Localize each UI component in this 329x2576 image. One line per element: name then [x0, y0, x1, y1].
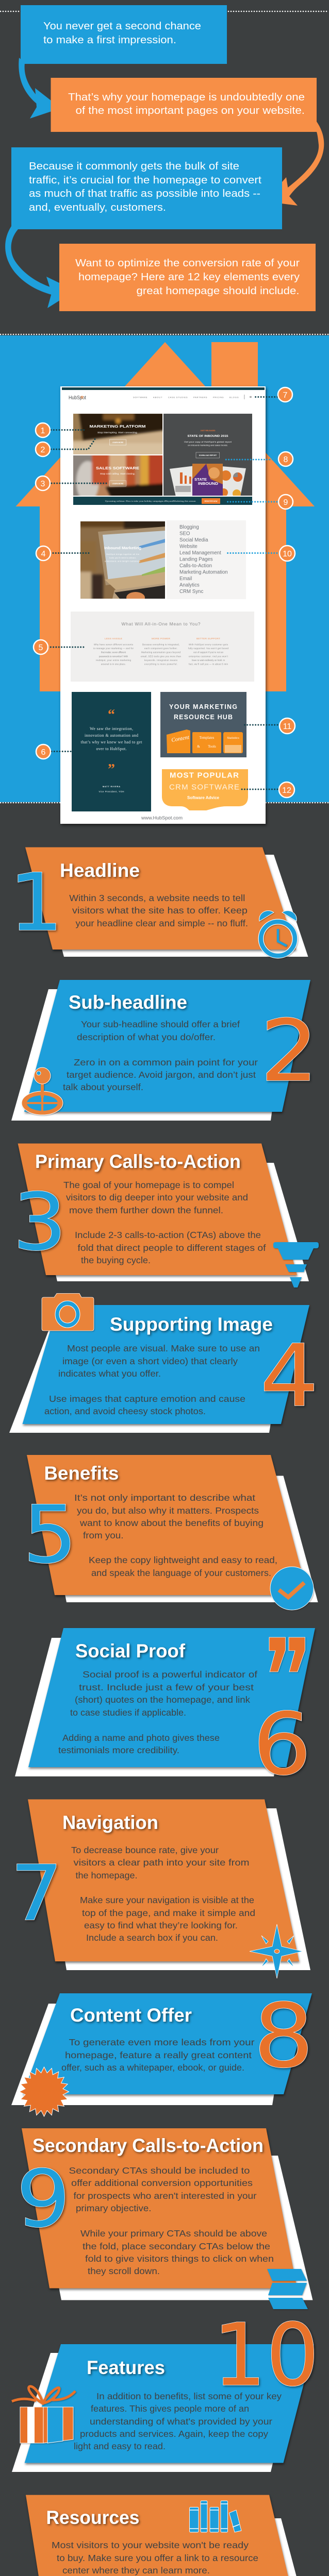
heading: primary calls-to-action: Primary Calls-to-Action — [35, 1151, 241, 1172]
text: resources body — [52, 2540, 278, 2576]
icon: gift box — [12, 2386, 75, 2443]
callout 11: 11 — [283, 722, 291, 731]
text: benefits body: Keep the copy lightweight and easy to read, — [89, 1555, 277, 1565]
intro box: homepage importance — [51, 78, 317, 132]
screenshot: feature list: Lead Management — [179, 550, 221, 556]
intro box: convert traffic: traffic, it’s crucial for the homepage to convert — [29, 174, 261, 186]
callout 4 — [36, 546, 91, 561]
text: navigation body: the homepage. — [75, 1870, 137, 1880]
text: primary calls-to-action body — [63, 1180, 266, 1265]
screenshot: benefits columns: that matter, seven different — [101, 651, 126, 653]
text: supporting image body: image (or even a short video) that clearly — [62, 1356, 238, 1366]
callout 8: 8 — [284, 455, 288, 464]
text: supporting image body: Use images that capture emotion and cause — [49, 1394, 245, 1404]
screenshot: feature list: Blogging — [179, 524, 199, 530]
text: supporting image body — [44, 1343, 260, 1416]
screenshot: benefits columns: With HubSpot every customer gets — [189, 643, 228, 646]
heading: content offer: Content Offer — [70, 2005, 192, 2026]
intro box: first impression: You never get a second chance — [43, 20, 201, 32]
screenshot: most popular CRM badge: MOST POPULAR — [170, 771, 239, 780]
text: content offer body: homepage, feature a really great content — [65, 2050, 252, 2060]
arrow: orange curve to third box — [265, 122, 324, 206]
text: social proof body: testimonials more credibility. — [58, 1745, 179, 1755]
number 9: 9 — [17, 2154, 70, 2245]
screenshot: feature list: Email — [179, 576, 192, 582]
callout 12 — [241, 782, 294, 798]
screenshot: benefits columns: enterprise customer. And you won’t — [189, 655, 228, 657]
text: secondary calls-to-action body: While your primary CTAs should be above — [80, 2228, 267, 2239]
text: features body: understanding of what's provided by your — [90, 2416, 272, 2427]
icon: check mark — [270, 1567, 314, 1610]
text: primary calls-to-action body: Include 2-3 calls-to-action (CTAs) above the — [75, 1230, 261, 1240]
heading: supporting image: Supporting Image — [110, 1314, 273, 1335]
intro box: optimize conversion: Want to optimize the conversion rate of your — [75, 257, 300, 269]
intro box: optimize conversion — [59, 244, 316, 311]
screenshot: testimonial: We saw the integration, — [90, 726, 133, 731]
text: navigation body: Make sure your navigation is visible at the — [80, 1895, 254, 1905]
screenshot: state of inbound panel: DOWNLOAD REPORT — [199, 454, 217, 456]
text: sub-headline body: Zero in on a common pain point for your — [74, 1057, 258, 1067]
screenshot: benefits columns: to manage your marketing — and for — [93, 647, 134, 650]
screenshot: supporting laptop image: Inbound Marketing — [104, 547, 141, 550]
text: social proof body: to case studies if applicable. — [70, 1707, 186, 1718]
text: secondary calls-to-action body: offer additional conversion opportunities — [71, 2178, 253, 2188]
text: supporting image body: indicates what you offer. — [58, 1368, 161, 1379]
intro box: first impression — [21, 5, 227, 64]
panel: social proof — [15, 1628, 315, 1794]
text: benefits body: you do, but also why it matters. Prospects — [77, 1505, 259, 1516]
number 4: 4 — [260, 1327, 319, 1426]
text: content offer body — [61, 2037, 255, 2073]
panel: features — [12, 2306, 319, 2472]
screenshot: testimonial: over to HubSpot. — [96, 747, 127, 751]
screenshot: supporting laptop image: HubSpot brings together all the — [106, 553, 139, 555]
callout 9: 9 — [284, 498, 288, 507]
intro box: convert traffic: and, eventually, customers. — [29, 201, 166, 213]
text: navigation body: To decrease bounce rate, give your — [71, 1845, 219, 1855]
screenshot: resource hub banner: Content — [171, 734, 190, 743]
text: features body: In addition to benefits, list some of your key — [96, 2391, 282, 2401]
screenshot: benefits columns: fully supported. You won’t get boxed — [188, 647, 229, 650]
panel: content offer — [11, 1985, 314, 2116]
heading: navigation: Navigation — [62, 1812, 158, 1833]
screenshot: benefits columns: What Will All-in-One Mean to You? — [122, 621, 201, 626]
screenshot: state of inbound panel: Get your copy of HubSpot’s global report — [184, 440, 232, 443]
text: primary calls-to-action body: fold that direct people to different stages of — [77, 1243, 266, 1253]
heading: features: Features — [87, 2357, 165, 2378]
screenshot: logo and navigation: ABOUT — [153, 396, 162, 399]
text: benefits body: want to know about the benefits of buying — [79, 1518, 264, 1528]
callout 3 — [36, 476, 107, 490]
callout 7 — [254, 387, 292, 402]
icon: compass — [250, 1924, 303, 1978]
text: social proof body: trust. Include just a few of your best — [79, 1682, 254, 1692]
text: primary calls-to-action body: visitors to dig deeper into your website and — [66, 1192, 248, 1202]
text: features body: light and easy to read. — [74, 2441, 166, 2451]
text: secondary calls-to-action body: the fold, place secondary CTAs below the — [83, 2241, 270, 2251]
screenshot: resource hub banner — [160, 692, 246, 757]
screenshot: benefits columns: everything is more powerful. — [144, 663, 177, 666]
number 1: 1 — [9, 857, 63, 949]
callout 6: 6 — [41, 748, 46, 757]
screenshot: feature list — [167, 520, 246, 599]
screenshot: benefits columns: out of support if you’re not an — [193, 651, 224, 653]
icon: joystick — [22, 1067, 63, 1115]
number 6: 6 — [253, 1695, 311, 1794]
screenshot: benefits columns: MORE POWER — [152, 637, 171, 640]
heading: resources: Resources — [46, 2507, 139, 2528]
screenshot: testimonial: ” — [108, 761, 115, 777]
screenshot: benefits columns: passwords to remember? With — [99, 655, 128, 657]
text: benefits body: from you. — [83, 1530, 124, 1540]
icon: camera — [42, 1293, 94, 1331]
screenshot: supporting laptop image — [80, 521, 165, 599]
text: benefits body: and speak the language of your customers. — [91, 1568, 271, 1578]
screenshot: testimonial: that’s why we knew we had to get — [80, 740, 142, 744]
text: headline body — [69, 893, 248, 928]
text: headline body: your headline clear and simple -- no fluff. — [75, 918, 248, 928]
screenshot: logo and navigation: HubSpot — [69, 395, 86, 401]
heading: social proof: Social Proof — [75, 1640, 186, 1662]
screenshot: logo and navigation — [69, 395, 251, 401]
screenshot: feature list: Landing Pages — [179, 556, 213, 563]
screenshot: sales software hero — [73, 455, 162, 496]
screenshot: most popular CRM badge — [162, 769, 248, 810]
text: resources body: Most visitors to your website won't be ready — [52, 2540, 249, 2550]
text: features body — [74, 2391, 282, 2451]
screenshot: logo and navigation: CASE STUDIES — [168, 396, 188, 399]
callout 11 — [244, 718, 295, 734]
number 8: 8 — [254, 1985, 314, 2088]
homepage screenshot — [60, 386, 266, 824]
intro box: convert traffic — [11, 147, 282, 229]
panel: primary calls-to-action — [12, 1144, 319, 1287]
screenshot: marketing platform hero: LEARN MORE — [112, 442, 123, 444]
text: primary calls-to-action body: the buying cycle. — [81, 1255, 151, 1265]
text: supporting image body: Most people are visual. Make sure to use an — [67, 1343, 260, 1353]
panel: benefits — [23, 1455, 318, 1610]
screenshot: benefits columns: keywords. Integration means — [144, 659, 177, 662]
number 2: 2 — [260, 1002, 319, 1100]
screenshot: testimonial — [72, 692, 151, 811]
screenshot: benefits columns: HubSpot, your entire marketing — [96, 659, 131, 662]
text: headline body: Within 3 seconds, a website needs to tell — [69, 893, 245, 903]
heading: benefits: Benefits — [44, 1463, 119, 1484]
callout 10 — [225, 546, 295, 561]
icon: books — [190, 2501, 241, 2532]
text: primary calls-to-action body: move them further down the funnel. — [69, 1205, 223, 1215]
screenshot: feature list: Social Media — [179, 537, 208, 543]
screenshot: benefits columns: have to wait endlessly on hold. In — [192, 659, 225, 662]
screenshot: feature list: SEO — [179, 531, 190, 537]
text: secondary calls-to-action body: fold to give visitors things to click on when — [85, 2253, 274, 2264]
panel: resources — [18, 2495, 317, 2576]
screenshot: logo and navigation: PARTNERS — [193, 396, 207, 399]
screenshot: testimonial: innovation & automation and — [85, 733, 138, 738]
screenshot: state of inbound panel: JUST RELEASED — [201, 430, 216, 432]
callout 8 — [223, 452, 293, 466]
callout 1: 1 — [41, 427, 45, 435]
callout 1 — [36, 423, 85, 437]
text: content offer body: To generate even more leads from your — [69, 2037, 255, 2047]
screenshot: testimonial: “ — [108, 707, 115, 723]
callout 6 — [36, 744, 72, 759]
screenshot: benefits columns: LESS HASSLE — [105, 637, 122, 640]
text: sub-headline body — [63, 1019, 258, 1092]
screenshot: state of inbound panel: STATE — [194, 477, 207, 482]
intro box: homepage importance: That’s why your homepage is undoubtedly one — [68, 91, 305, 103]
screenshot: most popular CRM badge: Software Advice — [187, 795, 220, 800]
screenshot: sales software hero: Stop cold calling. Start closing. — [100, 472, 135, 475]
callout 10: 10 — [283, 550, 292, 558]
screenshot: marketing platform hero: MARKETING PLATFORM — [90, 424, 145, 429]
heading: headline: Headline — [60, 860, 140, 881]
number 5: 5 — [23, 1489, 77, 1581]
text: sub-headline body: description of what you do/offer. — [77, 1032, 216, 1042]
screenshot: resource hub banner: Tools — [208, 744, 216, 749]
screenshot: testimonial: MATT RIVERA — [103, 786, 120, 788]
screenshot: sales software hero: LEARN MORE — [112, 483, 123, 485]
screenshot: marketing platform hero: Stop interrupting. Start connecting. — [97, 431, 138, 434]
icon: funnel — [273, 1242, 319, 1287]
text: secondary calls-to-action body: primary objective. — [76, 2203, 152, 2213]
screenshot: benefits columns — [71, 612, 254, 682]
text: sub-headline body: Your sub-headline should offer a brief — [81, 1019, 240, 1029]
screenshot: benefits columns: BETTER SUPPORT — [196, 637, 220, 640]
screenshot: feature list: CRM Sync — [179, 589, 203, 595]
text: navigation body: easy to find what they’re looking for. — [84, 1920, 238, 1930]
screenshot: state of inbound panel: INBOUND — [198, 481, 219, 486]
screenshot: feature list: Marketing Automation — [179, 570, 228, 575]
text: social proof body: Adding a name and photo gives these — [62, 1733, 220, 1743]
text: secondary calls-to-action body — [69, 2165, 274, 2276]
screenshot: resource hub banner: Statistics — [227, 736, 239, 740]
screenshot: most popular CRM badge: CRM SOFTWARE — [169, 783, 239, 791]
number 10: 10 — [213, 2306, 319, 2405]
callout 3: 3 — [41, 480, 45, 488]
screenshot: logo and navigation: BLOGS — [229, 396, 239, 399]
text: navigation body: visitors a clear path into your site from — [73, 1857, 250, 1868]
text: features body: features. This gives people more of an — [91, 2403, 249, 2414]
callout 12: 12 — [282, 786, 291, 795]
text: secondary calls-to-action body: they scroll down. — [88, 2266, 160, 2276]
screenshot: state of inbound panel: STATE OF INBOUND 2015 — [188, 435, 228, 438]
heading: secondary calls-to-action: Secondary Calls-to-Action — [32, 2135, 264, 2156]
intro box: homepage importance: of the most important pages on your website. — [75, 105, 305, 116]
screenshot: benefits columns: Why have seven different accounts — [94, 643, 133, 646]
screenshot: state of inbound panel — [163, 414, 252, 498]
screenshot: feature list: Website — [179, 544, 198, 549]
number 7: 7 — [10, 1849, 63, 1938]
text: primary calls-to-action body: The goal of your homepage is to compel — [63, 1180, 234, 1190]
text: social proof body: Social proof is a powerful indicator of — [83, 1669, 257, 1680]
screenshot: url: www.HubSpot.com — [141, 815, 183, 821]
text: navigation body: Include a search box if you can. — [86, 1933, 218, 1943]
screenshot: webinar bar — [73, 497, 252, 505]
icon: starburst — [20, 2067, 69, 2116]
text: benefits body: It’s not only important to describe what — [74, 1493, 255, 1503]
text: resources body: to buy. Make sure you offer a link to a resource — [57, 2553, 258, 2563]
arrow: blue curve to second box — [19, 58, 61, 118]
callout 2 — [36, 438, 95, 456]
text: headline body: visitors what the site has to offer. Keep — [72, 905, 248, 916]
icon: quotation marks — [269, 1637, 305, 1672]
screenshot: logo and navigation: PRICING — [213, 396, 224, 399]
intro box: optimize conversion: great homepage should include. — [136, 285, 299, 297]
text: sub-headline body: target audience. Avoid jargon, and don’t just — [67, 1070, 256, 1080]
screenshot: benefits columns: fact, we’ll call you — in about 5 min — [189, 663, 228, 666]
screenshot: testimonial: Vice President, YOH — [99, 790, 124, 793]
intro box: convert traffic: Because it commonly gets the bulk of site — [29, 160, 239, 172]
intro box: first impression: to make a first impression. — [43, 34, 176, 46]
text: navigation body: top of the page, and make it simple and — [82, 1908, 255, 1918]
screenshot: supporting laptop image: tools you’ll need to attract, — [109, 556, 136, 559]
panel: headline — [9, 847, 308, 957]
text: social proof body: (short) quotes on the homepage, and link — [75, 1694, 250, 1705]
screenshot: resource hub banner: RESOURCE HUB — [174, 714, 233, 721]
number 3: 3 — [12, 1177, 67, 1268]
text: social proof body — [58, 1669, 257, 1755]
screenshot: state of inbound panel: on inbound marketing and sales trends. — [188, 444, 228, 446]
icon: stacked layers — [267, 2269, 308, 2309]
text: navigation body — [71, 1845, 255, 1943]
screenshot: resource hub banner: & — [197, 744, 200, 749]
intro box: convert traffic: as much of that traffic as possible into leads -- — [29, 188, 260, 199]
text: benefits body — [74, 1493, 277, 1578]
text: sub-headline body: talk about yourself. — [63, 1082, 143, 1092]
panel: supporting image — [9, 1293, 319, 1433]
screenshot: benefits columns: arsenal is in one place. — [101, 663, 126, 666]
heading: sub-headline: Sub-headline — [69, 992, 187, 1013]
text: secondary calls-to-action body: for prospects who aren't interested in your — [73, 2191, 257, 2201]
screenshot: feature list: Analytics — [179, 582, 200, 588]
callout 9 — [225, 495, 293, 509]
screenshot: logo and navigation: SOFTWARE — [133, 396, 147, 399]
callout 5: 5 — [39, 643, 43, 652]
text: content offer body: offer, such as a whitepaper, ebook, or guide. — [61, 2062, 244, 2073]
screenshot: resource hub banner: YOUR MARKETING — [169, 703, 237, 710]
screenshot: webinar bar: Upcoming webinar: How to take your holiday campaigns #BeyondMarketing this season — [105, 500, 196, 502]
text: resources body: center where they can learn more. — [62, 2565, 210, 2575]
panel: secondary calls-to-action — [17, 2128, 312, 2309]
callout 2: 2 — [41, 446, 45, 454]
callout 7: 7 — [283, 391, 288, 400]
arrow: blue curve to fourth box — [5, 226, 75, 308]
screenshot: benefits columns: each component goes further. — [144, 647, 177, 650]
intro box: optimize conversion: homepage? Here are 12 key elements every — [78, 271, 300, 283]
screenshot: benefits columns: Marketing automation goes beyond — [141, 651, 181, 653]
callout 4: 4 — [41, 550, 46, 558]
text: supporting image body: action, and avoid cheesy stock photos. — [44, 1406, 206, 1416]
screenshot: benefits columns: Because everything is integrated, — [142, 643, 179, 646]
panel: sub-headline — [11, 980, 319, 1121]
panel: navigation — [10, 1799, 310, 1978]
screenshot: benefits columns: email, SEO tools give you more than — [141, 655, 182, 657]
screenshot: webinar bar: REGISTER NOW — [205, 500, 217, 502]
text: secondary calls-to-action body: Secondary CTAs should be included to — [69, 2165, 250, 2176]
screenshot: resource hub banner: Templates — [200, 736, 215, 740]
callout 5 — [34, 640, 86, 654]
screenshot: marketing platform hero — [73, 414, 162, 454]
screenshot: supporting laptop image: understand, and delight customers. — [105, 560, 141, 563]
screenshot: feature list: Calls-to-Action — [179, 563, 212, 569]
blue band with house illustration — [0, 334, 329, 803]
text: features body: products and services. Again, keep the copy — [80, 2429, 268, 2439]
icon: alarm clock — [259, 911, 297, 956]
screenshot: sales software hero: SALES SOFTWARE — [96, 466, 139, 470]
